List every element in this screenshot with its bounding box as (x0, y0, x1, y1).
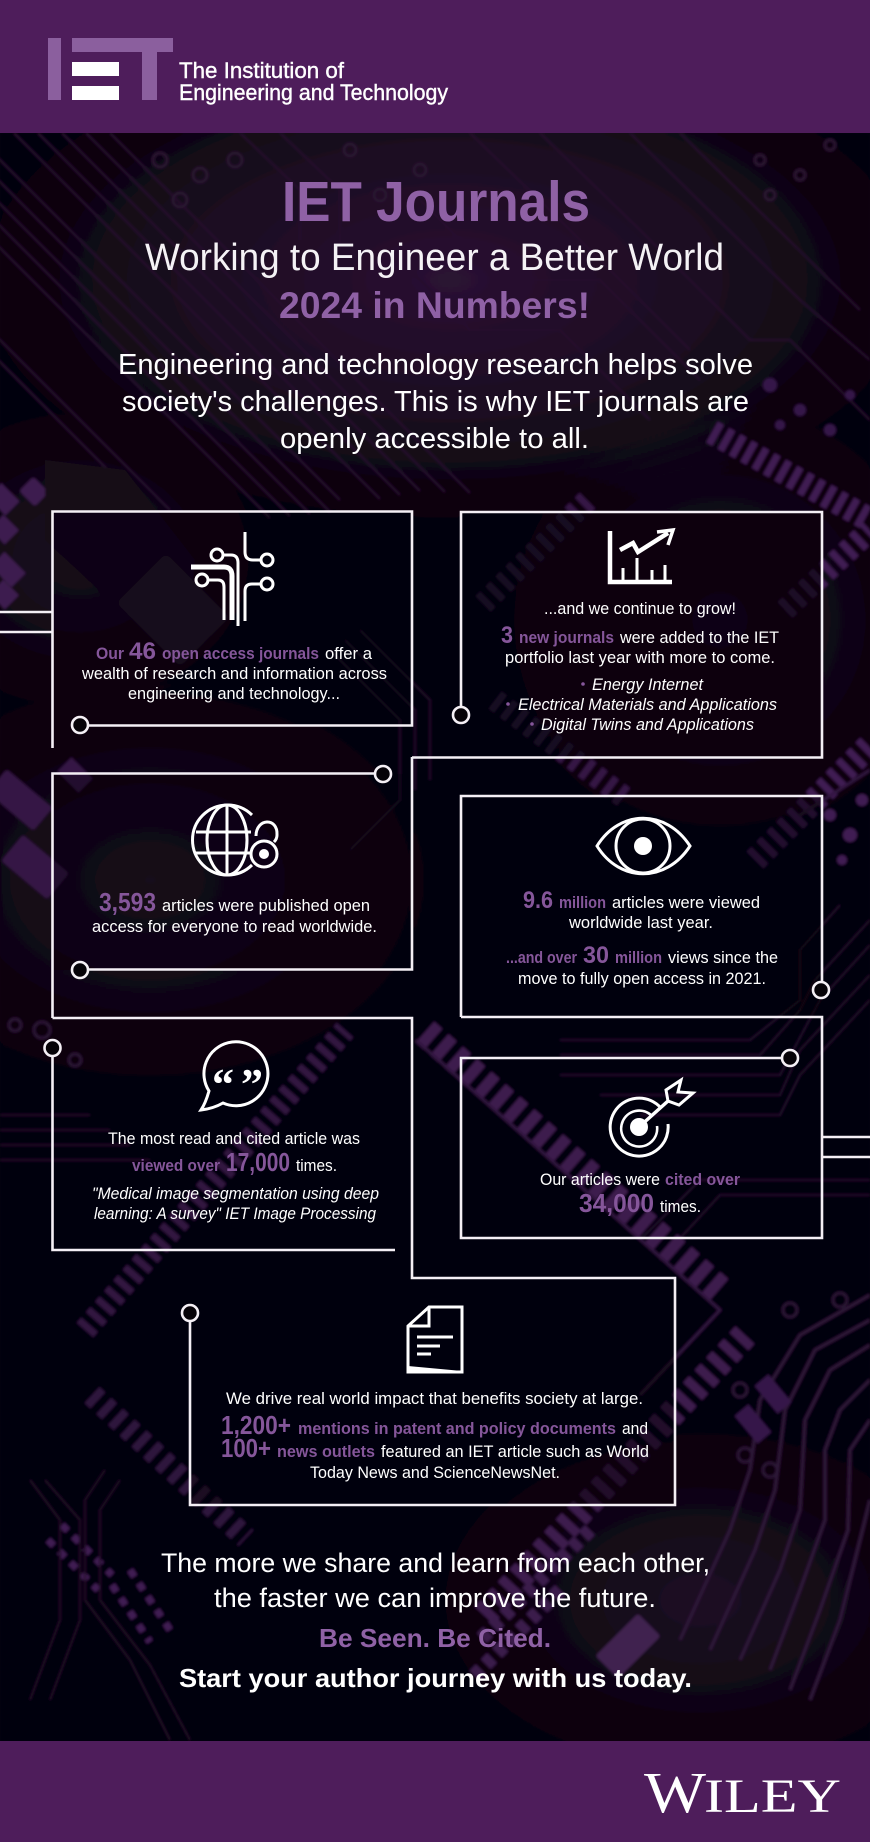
chip pin rows (48, 432, 870, 1642)
panel: 46 journals (0, 512, 412, 748)
title block: 2024 in Numbers! (279, 285, 590, 326)
closing message (161, 1548, 710, 1693)
text: impact: 100+ (221, 1433, 271, 1463)
text: articles published: 3,593 (99, 887, 156, 917)
text: impact: news outlets (277, 1443, 375, 1461)
icon: globe with open padlock (193, 805, 277, 875)
panel: 3,593 articles (52, 757, 412, 1018)
capacitor shapes left (0, 477, 63, 609)
Wiley logo: W (644, 1760, 706, 1825)
diagonal traces top-left (0, 133, 470, 518)
text: 46 open access journals: engineering and technology... (128, 685, 340, 703)
text: impact: mentions in patent and policy documents (298, 1420, 616, 1438)
text: views: ...and over (506, 949, 577, 967)
intro paragraph: Engineering and technology research helps solve (118, 349, 753, 381)
Wiley logo: ILEY (704, 1770, 841, 1823)
text: views: articles were viewed (612, 894, 760, 912)
text: impact: Today News and ScienceNewsNet. (310, 1464, 560, 1482)
footer band (0, 1741, 870, 1842)
title block (145, 170, 724, 326)
text: views: million (559, 894, 606, 912)
text: growth: Energy Internet (592, 676, 704, 694)
panel: citations (461, 1017, 870, 1238)
Wiley logo (644, 1760, 841, 1825)
text: most read: "Medical image segmentation using deep (92, 1185, 379, 1203)
text: growth: 3 (501, 622, 513, 649)
text: articles published (92, 887, 377, 936)
panel: 9.6 million views (461, 796, 829, 1017)
IET logo: The Institution of (179, 58, 345, 83)
text: impact: We drive real world impact that benefits society at large. (226, 1390, 643, 1408)
IET logo (48, 38, 448, 105)
text: citations: 34,000 (579, 1188, 654, 1218)
text: views: 9.6 (523, 887, 553, 914)
panel: real world impact (52, 1018, 675, 1505)
title block: IET Journals (282, 170, 590, 234)
text: citations: Our articles were (540, 1171, 660, 1189)
text: views: million (615, 949, 662, 967)
IET logo: Engineering and Technology (179, 80, 448, 105)
text: most read (92, 1130, 379, 1223)
closing message: The more we share and learn from each other, (161, 1548, 710, 1578)
text: articles published: articles were published open (162, 897, 370, 915)
icon: eye (597, 818, 690, 874)
text: views (506, 887, 778, 988)
intro paragraph: openly accessible to all. (280, 423, 589, 455)
text: impact: featured an IET article such as World (381, 1443, 649, 1461)
text: most read: 17,000 (226, 1147, 290, 1177)
text: 46 open access journals: 46 (129, 638, 156, 665)
text: 46 open access journals: Our (96, 645, 125, 663)
text: views: worldwide last year. (568, 914, 713, 932)
icon: target with dart (610, 1080, 693, 1156)
header band (0, 0, 870, 133)
text: growth: ...and we continue to grow! (544, 600, 736, 618)
text: views: 30 (583, 942, 609, 969)
icon: quote bubble: “ (212, 1060, 234, 1109)
text: most read: The most read and cited article was (108, 1130, 360, 1148)
dim glow over panels (53, 512, 412, 725)
text: citations: cited over (665, 1171, 741, 1189)
text: 46 open access journals: open access journals (162, 645, 319, 663)
title block: Working to Engineer a Better World (145, 237, 724, 279)
closing message: Be Seen. Be Cited. (319, 1623, 551, 1653)
icon: document (408, 1307, 462, 1373)
text: growth: were added to the IET (619, 629, 779, 647)
closing message: the faster we can improve the future. (214, 1583, 656, 1613)
text: articles published: access for everyone to read worldwide. (92, 918, 377, 936)
text: 46 open access journals (81, 638, 387, 703)
icon: quote bubble (201, 1042, 268, 1110)
text: views: move to fully open access in 2021. (518, 970, 766, 988)
text: most read: times. (296, 1157, 337, 1175)
icon: quote bubble: ” (241, 1060, 263, 1109)
text: growth: Electrical Materials and Applications (518, 696, 777, 714)
intro paragraph: society's challenges. This is why IET journals are (122, 386, 749, 418)
icon: growth chart (610, 530, 673, 582)
icon: circuit (191, 532, 273, 626)
text: 46 open access journals: offer a (325, 645, 373, 663)
panel: new journals (412, 512, 822, 758)
text: citations (540, 1171, 741, 1218)
text: impact: 1,200+ (221, 1410, 291, 1440)
text: growth: Digital Twins and Applications (541, 716, 754, 734)
text: 46 open access journals: wealth of research and information across (81, 665, 387, 683)
text: citations: times. (660, 1198, 701, 1216)
text: impact: and (622, 1420, 648, 1438)
intro paragraph (118, 349, 753, 455)
text: growth: portfolio last year with more to come. (505, 649, 775, 667)
closing message: Start your author journey with us today. (179, 1663, 692, 1693)
text: growth: new journals (519, 629, 614, 647)
text: views: views since the (668, 949, 778, 967)
text: most read: learning: A survey" IET Image Processing (94, 1205, 377, 1223)
right-side pads (763, 378, 855, 436)
text: impact (221, 1390, 649, 1482)
panel: most read article (44, 1040, 395, 1250)
text: most read: viewed over (132, 1157, 221, 1175)
text: growth (501, 600, 779, 734)
